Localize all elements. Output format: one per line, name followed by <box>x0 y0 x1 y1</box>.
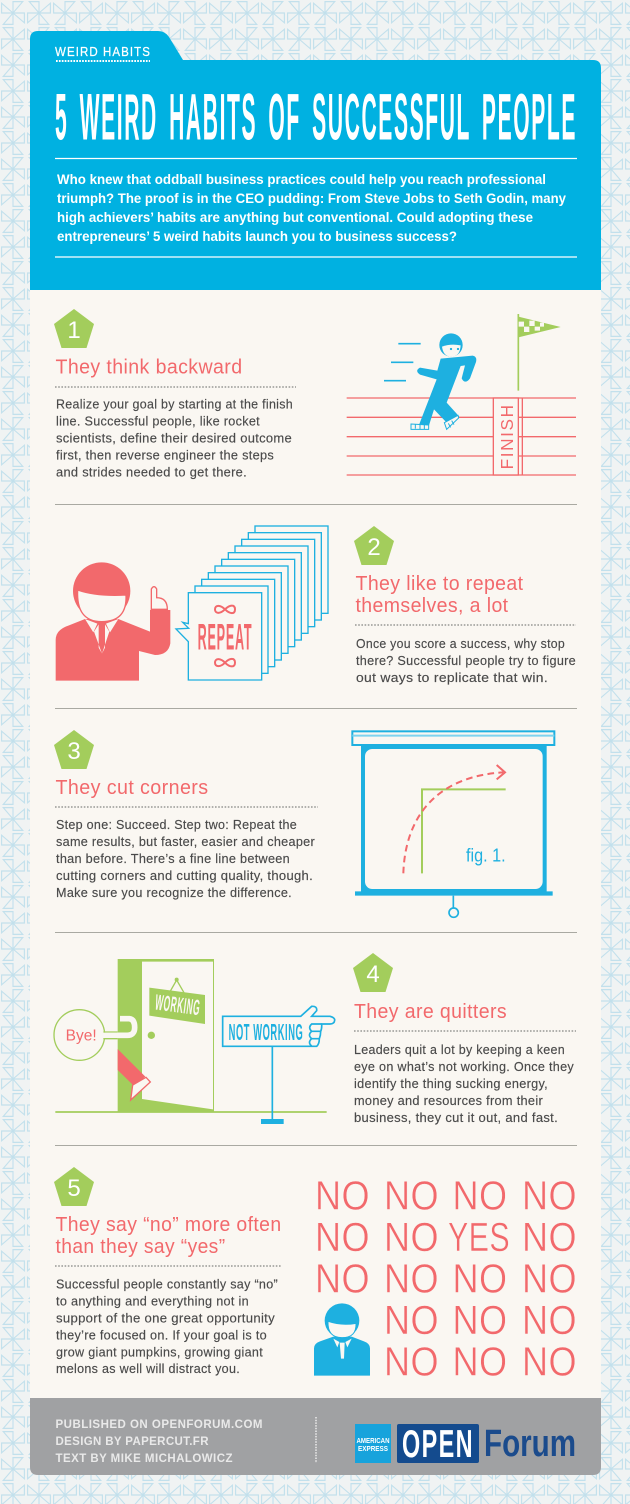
heading 5: They say “no” more often <box>56 1214 282 1236</box>
track <box>347 398 576 475</box>
no / yes word grid: YES <box>448 1214 510 1260</box>
not working sign <box>223 1006 335 1124</box>
icon: blue person <box>314 1303 370 1376</box>
logo: American Express <box>355 1424 391 1463</box>
leg <box>118 1049 150 1100</box>
logo: American Express: EXPRESS <box>358 1444 388 1453</box>
body text 5: Successful people constantly say “no” <box>56 1276 278 1292</box>
man <box>56 562 170 681</box>
body text 5: grow giant pumpkins, growing giant <box>56 1344 263 1360</box>
no / yes word grid: NO <box>522 1172 577 1218</box>
body text 3: Step one: Succeed. Step two: Repeat the <box>56 817 297 832</box>
no / yes word grid: NO <box>522 1339 577 1385</box>
bye speech bubble: Bye! <box>66 1028 97 1045</box>
number badge 2: 2 <box>367 534 381 561</box>
body text 4: Leaders quit a lot by keeping a keen <box>354 1042 565 1057</box>
heading 3: They cut corners <box>56 777 208 799</box>
not working sign: NOT WORKING <box>229 1019 303 1045</box>
intro text: triumph? The proof is in the CEO pudding: From Steve Jobs to Seth Godin, many <box>57 191 566 206</box>
body text 2: there? Successful people try to figure <box>356 653 576 668</box>
no / yes word grid: NO <box>384 1214 439 1260</box>
no / yes word grid: NO <box>384 1297 439 1343</box>
body text 5: they’re focused on. If your goal is to <box>56 1328 267 1342</box>
illustration: projection screen <box>352 731 554 917</box>
credits: DESIGN BY PAPERCUT.FR <box>56 1436 209 1448</box>
number badge 2 <box>354 526 394 565</box>
no / yes word grid: NO <box>315 1255 370 1301</box>
body text 3: Make sure you recognize the difference. <box>56 885 292 900</box>
runner <box>411 333 476 429</box>
illustration: door and signs: WORKING <box>154 990 202 1020</box>
body text 2: Once you score a success, why stop <box>356 636 565 651</box>
heading 5: than they say “yes” <box>56 1236 226 1258</box>
bye speech bubble <box>54 1010 135 1060</box>
logo: OPEN Forum <box>397 1423 576 1466</box>
body text 1: scientists, define their desired outcome <box>56 430 292 446</box>
no / yes word grid: NO <box>452 1255 508 1301</box>
heading 2 <box>356 573 524 617</box>
heading 1: They think backward <box>56 356 242 378</box>
panel: header <box>30 31 601 290</box>
body text 5: support of the one great opportunity <box>56 1310 275 1326</box>
body text 3 <box>56 817 315 900</box>
papers stack <box>176 526 328 680</box>
body text 2 <box>356 636 576 685</box>
number badge 4: 4 <box>366 961 380 988</box>
intro text: Who knew that oddball business practices could help you reach professional <box>57 172 546 187</box>
chart lines <box>422 789 506 873</box>
panel: footer <box>30 1398 601 1475</box>
speed lines <box>384 344 421 381</box>
no / yes word grid: NO <box>522 1297 577 1343</box>
no / yes word grid: NO <box>384 1255 439 1301</box>
body text 5: melons as well will distract you. <box>56 1361 240 1376</box>
body text 3: than before. There’s a fine line between <box>56 851 290 866</box>
no / yes word grid <box>315 1172 577 1385</box>
panel: habit 3 <box>54 730 554 917</box>
panel: habit 5 <box>54 1167 577 1385</box>
flag <box>518 314 561 391</box>
number badge 3 <box>54 730 94 769</box>
finish label: FINISH <box>497 403 517 469</box>
illustration: runner at finish line <box>347 314 576 475</box>
no / yes word grid: NO <box>384 1172 439 1218</box>
body text 4: money and resources from their <box>354 1093 543 1108</box>
body text 5: to anything and everything not in <box>56 1294 249 1308</box>
number badge 1 <box>54 309 94 348</box>
body text 4 <box>354 1042 574 1125</box>
body text 5 <box>56 1276 278 1376</box>
working sign <box>149 978 205 1024</box>
no / yes word grid: NO <box>522 1255 577 1301</box>
heading 2: They like to repeat <box>356 573 524 595</box>
no / yes word grid: NO <box>452 1339 508 1385</box>
panel: habit 4 <box>54 953 576 1125</box>
body text 1: and strides needed to get there. <box>56 464 247 480</box>
body text 1: line. Successful people, like rocket <box>56 414 260 428</box>
logo: OPEN Forum: Forum <box>484 1423 576 1465</box>
logo: OPEN Forum: OPEN <box>402 1423 474 1466</box>
intro text: high achievers’ habits are anything but conventional. Could adopting these <box>57 210 533 225</box>
tab label: WEIRD HABITS <box>55 44 151 59</box>
figure label: fig. 1. <box>466 845 506 866</box>
credits: TEXT BY MIKE MICHALOWICZ <box>56 1453 232 1465</box>
body text 1: Realize your goal by starting at the finish <box>56 396 293 412</box>
intro text: entrepreneurs’ 5 weird habits launch you to business success? <box>57 229 457 244</box>
intro text <box>57 172 566 244</box>
no / yes word grid: NO <box>522 1214 577 1260</box>
credits <box>56 1419 262 1465</box>
number badge 5: 5 <box>67 1175 81 1202</box>
panel: habit 2 <box>56 526 576 685</box>
infinity symbols <box>215 606 235 666</box>
number badge 4 <box>353 953 393 992</box>
panel: habit 1 <box>54 309 576 480</box>
heading 4: They are quitters <box>354 1001 507 1023</box>
no / yes word grid: NO <box>452 1297 508 1343</box>
no / yes word grid: NO <box>315 1172 370 1218</box>
body text 3: cutting corners and cutting quality, though. <box>56 868 313 883</box>
heading 2: themselves, a lot <box>356 595 509 617</box>
body text 4: eye on what’s not working. Once they <box>354 1059 574 1074</box>
door <box>118 959 214 1112</box>
logo: American Express: AMERICAN <box>356 1436 390 1445</box>
heading 5 <box>56 1214 282 1258</box>
body text 1: first, then reverse engineer the steps <box>56 448 274 462</box>
number badge 1: 1 <box>67 317 81 344</box>
number badge 5 <box>54 1167 94 1206</box>
panel: body background <box>30 290 601 1398</box>
no / yes word grid: NO <box>384 1339 439 1385</box>
illustration: man saying repeat: REPEAT <box>198 616 252 658</box>
body text 2: out ways to replicate that win. <box>356 670 548 685</box>
body text 4: business, they cut it out, and fast. <box>354 1110 558 1125</box>
body text 4: identify the thing sucking energy, <box>354 1076 548 1091</box>
illustration: man saying repeat <box>56 526 328 681</box>
credits: PUBLISHED ON OPENFORUM.COM <box>56 1419 262 1431</box>
illustration: door and signs <box>54 959 335 1124</box>
body text 1 <box>56 396 293 480</box>
no / yes word grid: NO <box>315 1214 370 1260</box>
number badge 3: 3 <box>67 738 81 765</box>
no / yes word grid: NO <box>452 1172 508 1218</box>
body text 3: same results, but faster, easier and cheaper <box>56 834 315 849</box>
